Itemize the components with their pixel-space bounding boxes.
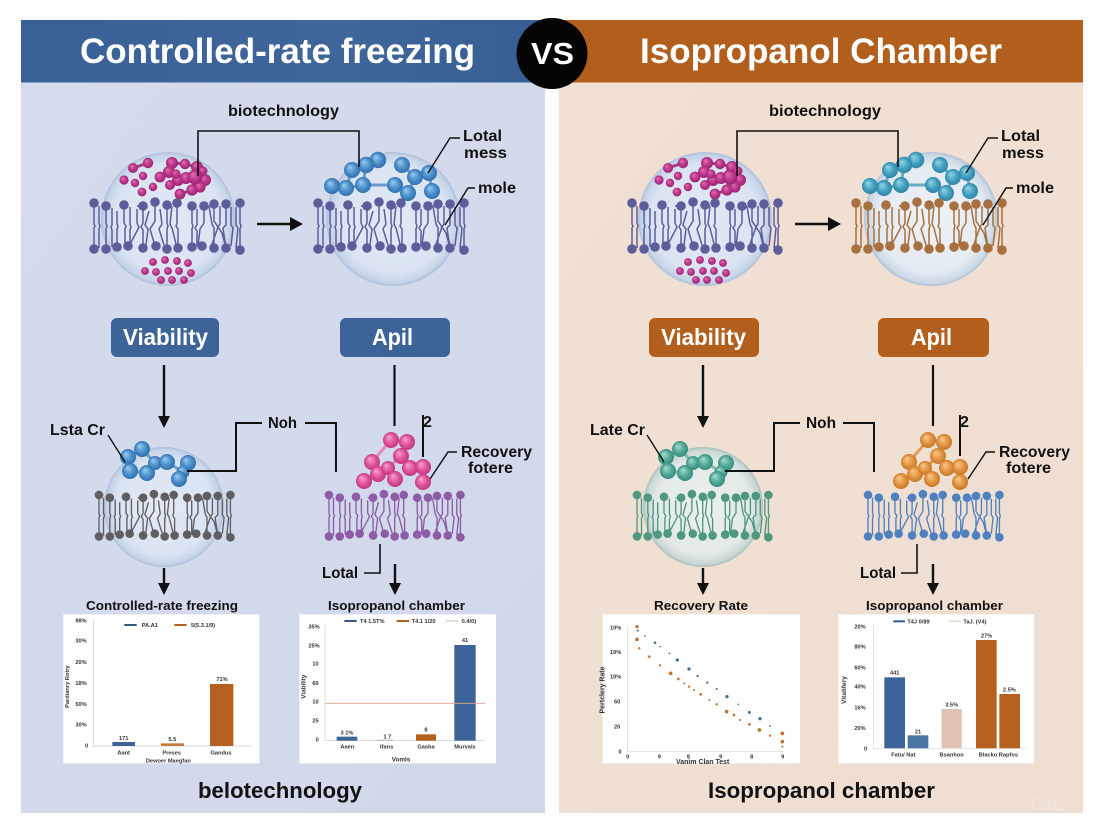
arrow: to right chart: [927, 564, 939, 595]
cell diagram: initial vesicle: [89, 152, 245, 286]
scatter chart: recovery rate: Vanim Clan Test: [676, 759, 730, 766]
bar chart: viability grouped: 60%: [854, 665, 866, 671]
bar chart: permeability recovery: Aant: [117, 750, 130, 756]
arrow: to left chart: [158, 568, 170, 595]
label: mole: [445, 180, 516, 225]
bar chart: viability grouped: 16%: [854, 705, 866, 711]
bar chart: viability grouped: 27%: [981, 633, 992, 639]
bar chart: viability: Gasha: [417, 745, 435, 751]
bar chart: viability: 8: [424, 728, 428, 734]
label: Lotal mess: Lotal: [463, 128, 502, 145]
bar chart: permeability recovery: 30%: [75, 639, 87, 645]
label: Late Cr: [590, 422, 664, 462]
bar chart: viability grouped: 20%: [854, 726, 866, 732]
scatter chart: recovery rate: 9: [687, 754, 690, 760]
bar chart: viability grouped: 21: [915, 729, 921, 735]
button: Apil: [878, 318, 989, 357]
bar chart: viability: Aaen: [340, 745, 355, 751]
label: Noh with connectors: Noh: [268, 415, 297, 432]
scatter chart: recovery rate: 60: [614, 700, 620, 706]
scatter chart: recovery rate: 10%: [610, 650, 621, 656]
panel: isopropanol chamber background: [559, 82, 1083, 813]
bar chart: viability grouped: Bsanhoo: [940, 753, 964, 759]
line: apil down: [932, 365, 934, 426]
footer label: belotechnology: belotechnology: [198, 778, 363, 803]
label: Lotal mess: Lotal: [1001, 128, 1040, 145]
bar chart: viability grouped: [838, 614, 1034, 763]
button: Apil: [340, 318, 450, 357]
bar chart: viability: 1 7: [383, 735, 391, 741]
bar chart: viability grouped: 20%: [854, 625, 866, 631]
bar chart: viability grouped: Fatu/ Nat: [891, 753, 916, 759]
watermark: Gro: [1031, 794, 1064, 816]
bar chart: viability: 10: [312, 699, 319, 705]
bar chart: viability grouped: T4J 0/89: [907, 619, 930, 625]
panel content: left: [50, 103, 532, 803]
label: Lotal: Lotal: [860, 565, 896, 582]
label: Lotal: [322, 544, 380, 582]
VS badge: [516, 18, 588, 89]
button: Apil: Apil: [372, 324, 413, 350]
arrow: between vesicles: [795, 217, 841, 231]
arrow: viability down: [697, 365, 709, 428]
bar chart: viability: 25: [312, 719, 319, 725]
bar chart: permeability recovery: 171: [119, 736, 128, 742]
bar chart: viability grouped: 40%: [854, 685, 866, 691]
diagram: orange cluster on blue membrane: [864, 432, 1004, 542]
label: Lotal mess: [966, 128, 1044, 173]
bar chart: viability grouped: Vitalifery: [841, 676, 848, 704]
arrow: between vesicles: [257, 217, 303, 231]
bar chart: permeability recovery: 50%: [75, 702, 87, 708]
bar chart: permeability recovery: 30%: [75, 723, 87, 729]
header bar: controlled-rate freezing: [21, 20, 552, 82]
bar chart: viability grouped: TaJ. (V4): [963, 619, 987, 625]
bar chart: viability: 3 1%: [341, 731, 353, 737]
header bar: isopropanol chamber: [552, 20, 1083, 82]
connector bracket: [737, 131, 898, 176]
bar chart: permeability recovery: 0: [85, 744, 88, 750]
diagram: pink cluster on purple membrane: [325, 432, 465, 542]
scatter chart: recovery rate: 9: [658, 754, 661, 760]
bar chart: permeability recovery: 18%: [75, 681, 87, 687]
bar chart: viability: Vomls: [392, 756, 411, 763]
bar chart: permeability recovery: Pardianry Rotry: [65, 665, 71, 708]
footer label: isopropanol chamber: Isopropanol chamber: [708, 778, 935, 803]
label: biotechnology: biotechnology: [228, 103, 339, 120]
bar chart: viability: Viability: [301, 674, 308, 699]
bar chart: viability: Ifans: [380, 745, 393, 751]
button: Viability: Viability: [661, 324, 746, 350]
scatter chart: recovery rate: 9: [781, 754, 784, 760]
bar chart: viability grouped: 441: [890, 671, 899, 677]
scatter chart: recovery rate: 9: [719, 754, 722, 760]
panel content: right: [590, 103, 1070, 816]
scatter chart: recovery rate: [600, 614, 800, 766]
bar chart: permeability recovery: Dewoer Maegfan: [146, 759, 191, 765]
label: biotechnology: biotechnology: [769, 103, 881, 120]
bar chart: viability: Murvals: [454, 745, 476, 751]
bar chart: permeability recovery: Preses: [162, 750, 181, 756]
arrow: to right chart: [389, 564, 401, 595]
cell diagram: initial vesicle: [627, 152, 783, 286]
bar chart: permeability recovery: 71%: [216, 677, 228, 683]
label: Recovery fotere: [430, 444, 532, 479]
button: Apil: Apil: [911, 324, 952, 350]
label: Late Cr: Late Cr: [590, 422, 645, 439]
label: Recovery fotere: Recovery: [999, 444, 1070, 461]
label: Noh with connectors: [187, 415, 336, 472]
label: Lsta Cr: [50, 422, 125, 462]
chart title: controlled-rate freezing: Controlled-rate freezing: [86, 598, 238, 613]
scatter chart: recovery rate: 20: [614, 725, 620, 731]
bar chart: permeability recovery: PA.A1: [142, 623, 158, 629]
cell diagram: vesicle with teal cluster: [851, 152, 1007, 286]
bar chart: permeability recovery: Gandus: [210, 750, 232, 756]
VS badge: VS: [531, 36, 574, 71]
bar chart: viability: 0.4/0): [462, 619, 476, 625]
cell diagram: vesicle with green cluster: [633, 441, 773, 567]
label: Recovery fotere: [968, 444, 1070, 479]
label: Lotal: Lotal: [322, 565, 358, 582]
button: Viability: [111, 318, 219, 357]
bar chart: viability: 25%: [308, 643, 320, 649]
bar chart: permeability recovery: [63, 614, 259, 765]
button: Viability: Viability: [123, 324, 208, 350]
label: Recovery fotere: fotere: [468, 460, 513, 477]
label: 2 marker: 2: [960, 414, 969, 431]
label: Noh with connectors: Noh: [806, 415, 836, 432]
bar chart: viability: 41: [462, 638, 468, 644]
scatter chart: recovery rate: 0: [626, 754, 629, 760]
cell diagram: vesicle with small blue cluster: [95, 441, 235, 567]
line: apil down: [393, 365, 396, 426]
label: Lotal mess: mess: [1002, 145, 1044, 162]
label: 2 marker: [423, 414, 432, 457]
bar chart: viability grouped: 0: [864, 746, 867, 752]
label: Lsta Cr: Lsta Cr: [50, 422, 105, 439]
scatter chart: recovery rate: 10%: [610, 675, 621, 681]
cell diagram: vesicle with blue cluster: [313, 152, 469, 286]
bar chart: viability: T4 1.5T%: [360, 619, 385, 625]
heading: isopropanol chamber: Isopropanol Chamber: [640, 32, 1002, 71]
chart title: isopropanol chamber: Isopropanol chamber: [328, 598, 465, 613]
label: Recovery fotere: fotere: [1006, 460, 1051, 477]
chart title: isopropanol chamber: Isopropanol chamber: [866, 598, 1003, 613]
arrow: viability down: [158, 365, 170, 428]
bar chart: viability: 10: [312, 662, 319, 668]
label: mole: [983, 180, 1054, 225]
button: Viability: [649, 318, 759, 357]
bar chart: permeability recovery: 20%: [75, 660, 87, 666]
bar chart: viability grouped: 3.5%: [945, 702, 958, 708]
label: 2 marker: 2: [423, 414, 432, 431]
label: mole: mole: [478, 180, 516, 197]
chart title: recovery rate: Recovery Rate: [654, 598, 748, 613]
bar chart: viability: 60: [312, 681, 319, 687]
scatter chart: recovery rate: Pertclery Rate: [600, 666, 607, 713]
bar chart: permeability recovery: 98%: [75, 619, 87, 625]
label: Noh with connectors: [725, 415, 874, 472]
bar chart: permeability recovery: 5.5: [168, 737, 176, 743]
label: Lotal: [860, 544, 917, 582]
arrow: to left chart: [697, 568, 709, 595]
bar chart: viability grouped: 2.5%: [1003, 688, 1016, 694]
label: 2 marker: [960, 414, 969, 456]
scatter chart: recovery rate: 8: [750, 754, 753, 760]
connector bracket: [198, 131, 359, 176]
bar chart: viability: 35%: [308, 624, 320, 630]
bar chart: viability: T4.1 1/20: [412, 619, 436, 625]
bar chart: viability grouped: 80%: [854, 645, 866, 651]
label: Lotal mess: [428, 128, 507, 173]
scatter chart: recovery rate: 10%: [610, 626, 621, 632]
panel: controlled-rate freezing background: [21, 82, 545, 813]
label: Lotal mess: mess: [464, 145, 507, 162]
label: mole: mole: [1016, 180, 1054, 197]
heading: controlled-rate freezing: Controlled-rate freezing: [80, 32, 475, 71]
scatter chart: recovery rate: 0: [618, 749, 621, 755]
label: Recovery fotere: Recovery: [461, 444, 532, 461]
bar chart: viability grouped: Blacko Rapfos: [979, 753, 1018, 759]
bar chart: permeability recovery: 5(5.3.1/9): [191, 623, 215, 629]
bar chart: viability: [299, 614, 496, 763]
bar chart: viability: 0: [316, 738, 319, 744]
